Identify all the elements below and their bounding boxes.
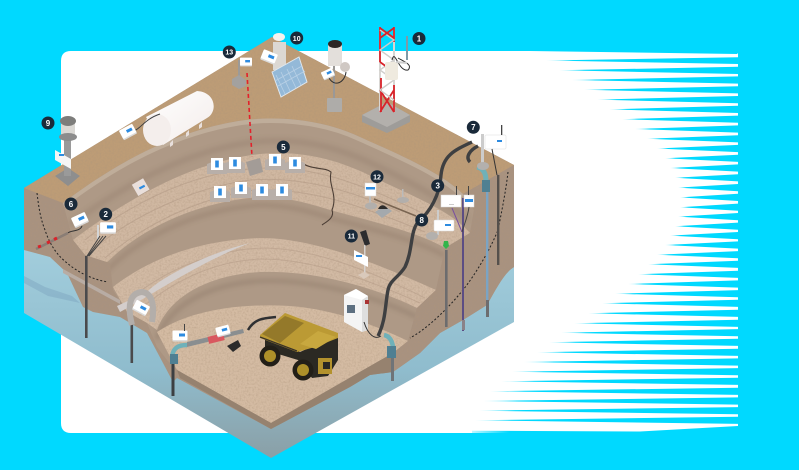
- marker 2: 2: [103, 210, 108, 219]
- communication tower: [362, 27, 410, 133]
- marker 5: 5: [281, 143, 286, 152]
- marker 13: 13: [225, 50, 233, 57]
- nodes 3: [441, 186, 474, 232]
- marker 10: 10: [293, 36, 301, 43]
- weather station: [321, 40, 350, 112]
- white panel with cyan spiked right edge: [61, 51, 740, 434]
- marker 13: [223, 46, 236, 58]
- bench 2: [113, 238, 436, 330]
- pit floor pipe right: [384, 335, 396, 358]
- extensometer red markers: [36, 233, 68, 249]
- blue aquifer band on left face: [24, 276, 80, 303]
- haul truck: [260, 313, 338, 380]
- node 7: [477, 125, 506, 175]
- node 11 with solar: [354, 230, 370, 279]
- rock strip below floor edge: [177, 353, 393, 429]
- wall node: [132, 178, 150, 196]
- control cabinet: [344, 289, 381, 337]
- concrete culvert ring: [130, 292, 153, 325]
- node pit left: [172, 324, 188, 342]
- marker 3: [431, 179, 444, 192]
- pipe run left with valve: [170, 317, 276, 364]
- marker 10: [290, 32, 303, 44]
- marker 9: [42, 116, 54, 130]
- isometric mine block: [24, 37, 514, 458]
- marker 7: [467, 121, 480, 134]
- dashed failure surface right: [410, 172, 508, 338]
- solar node 10: [260, 33, 307, 97]
- wireless sensor cluster 5: [207, 154, 305, 202]
- node 6: [68, 212, 89, 233]
- crack in bench: [302, 163, 334, 225]
- road strip on bench: [117, 243, 250, 312]
- node 12: [365, 183, 409, 218]
- marker 8: [415, 214, 428, 226]
- red dashed link: [247, 73, 252, 157]
- pit floor: [157, 305, 408, 423]
- second cable with teal pipe: [468, 146, 490, 192]
- dashed failure surface left: [37, 193, 108, 282]
- node 8: [426, 210, 454, 249]
- monitoring wells: [85, 175, 499, 396]
- grey drain strip: [63, 269, 120, 304]
- node on valve: [215, 324, 231, 338]
- pit terraces: [63, 118, 470, 423]
- marker 8: 8: [419, 216, 424, 225]
- marker 6: 6: [69, 200, 74, 209]
- fuel tank: [119, 91, 214, 147]
- groundwater layer: [24, 240, 514, 458]
- meteorological station 9: [55, 116, 80, 186]
- sandy top surface: [24, 37, 514, 203]
- node with pole 13: [232, 58, 252, 89]
- red marks on rod: [38, 238, 57, 247]
- rock cross-section: [24, 37, 514, 429]
- bench 1: [73, 153, 470, 270]
- thick cable from surface to pit: [378, 142, 472, 336]
- marker 7: 7: [471, 123, 476, 132]
- marker 11: [345, 230, 358, 242]
- node at culvert: [132, 300, 150, 316]
- marker 1: 1: [417, 34, 422, 43]
- marker 12: [370, 170, 384, 183]
- right face cut: [393, 165, 514, 372]
- node 2: [87, 222, 116, 256]
- marker 12: 12: [373, 174, 381, 181]
- marker 1: [412, 32, 426, 45]
- marker 6: [64, 198, 78, 210]
- marker 11: 11: [348, 234, 355, 241]
- marker 3: 3: [435, 182, 440, 190]
- marker 2: [99, 208, 112, 221]
- rim highlight: [63, 121, 463, 205]
- crack across lower bench: [374, 199, 416, 216]
- marker 5: [277, 140, 290, 154]
- marker 9: 9: [46, 119, 51, 128]
